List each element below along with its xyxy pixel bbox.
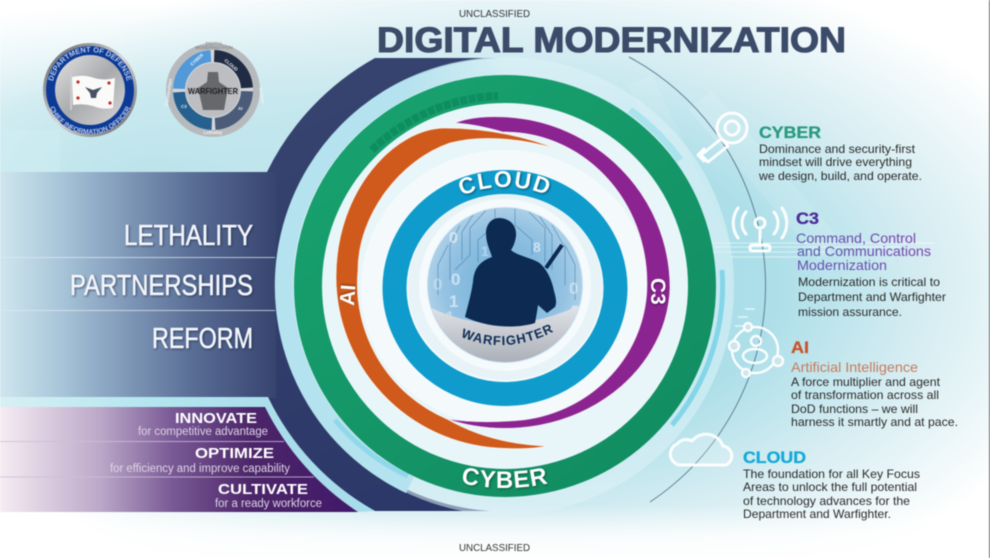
label: c3: C3 — [646, 278, 669, 305]
block: cloud — [743, 448, 920, 521]
icon: cloud — [670, 434, 732, 465]
text: cultivate: CULTIVATE — [218, 481, 308, 498]
text: innovate: INNOVATE — [175, 410, 257, 427]
block: ai: Artificial Intelligence — [791, 359, 918, 375]
block: ai: harness it smartly and at pace. — [791, 415, 958, 429]
text: cultivate — [215, 481, 322, 510]
seal small labels: MODERNIZATION — [195, 45, 233, 50]
block: cloud: Areas to unlock the full potential — [743, 480, 917, 494]
binary digits — [434, 232, 578, 316]
seal small labels: CLOUD — [223, 58, 239, 73]
flag — [72, 76, 115, 109]
binary digits: 0 — [569, 279, 578, 298]
panel: strategic priorities band — [0, 172, 276, 398]
seal: warfighter digital modernization: WARFIGHTER — [188, 86, 238, 96]
seal small labels: CYBER — [189, 52, 205, 67]
block: c3: Modernization — [797, 257, 887, 273]
seal small labels: AI — [238, 106, 242, 111]
text: optimize — [110, 445, 290, 475]
icon: key — [698, 113, 747, 162]
text: partnerships: PARTNERSHIPS — [70, 270, 253, 302]
binary digits: 1 — [445, 308, 454, 327]
block: cyber: CYBER — [759, 123, 821, 142]
block: cyber: Dominance and security-first — [759, 142, 916, 156]
text: innovate: for competitive advantage — [138, 426, 268, 438]
seal small labels — [164, 41, 266, 135]
seal small labels: Reform — [258, 87, 266, 104]
arc: c3 purple crescent — [447, 117, 670, 428]
flag pole — [70, 70, 72, 110]
navy crescent — [267, 58, 497, 511]
background top left tint — [0, 0, 570, 345]
title: DIGITAL MODERNIZATION — [377, 21, 846, 60]
block: c3: C3 — [796, 209, 819, 228]
text: cultivate: for a ready workforce — [215, 498, 322, 510]
seal small labels: Partnerships — [164, 78, 173, 106]
block: cloud: CLOUD — [743, 448, 806, 467]
seal small labels: DIGITAL — [205, 41, 223, 46]
seal: department of defense cio: CHIEF INFORMATION OFFICER — [50, 106, 130, 134]
block: c3 — [796, 209, 946, 319]
block: c3: Modernization is critical to — [798, 275, 940, 289]
inner disk — [319, 100, 691, 472]
block: cloud: Department and Warfighter. — [743, 507, 891, 521]
block: ai: AI — [791, 338, 809, 357]
ring: cloud — [394, 182, 616, 394]
binary digits: 0 — [449, 230, 458, 247]
label: ai: AI — [336, 284, 360, 306]
concentric target — [308, 89, 702, 483]
block: cloud: The foundation for all Key Focus — [743, 467, 920, 481]
seal segments — [178, 55, 248, 125]
block: ai: A force multiplier and agent — [791, 375, 941, 389]
seal lettering: DEPARTMENT OF DEFENSE — [48, 46, 132, 82]
band divider lines — [0, 258, 275, 310]
seal: warfighter digital modernization — [164, 41, 266, 137]
text: reform: REFORM — [152, 323, 253, 355]
block: c3: Command, Control — [796, 230, 916, 246]
panel: light cyan frame of lower panel — [0, 397, 375, 512]
binary digits: 8 — [533, 239, 541, 255]
text: warfighter: WARFIGHTER — [462, 324, 554, 346]
soldier silhouette — [465, 218, 562, 327]
flag stars — [76, 80, 112, 105]
right edge line — [989, 0, 990, 558]
binary digits: 1 — [449, 292, 458, 311]
seal small labels: Lethality — [204, 130, 223, 135]
block: c3: Department and Warfighter — [798, 290, 946, 304]
block: ai: DoD functions – we will — [791, 402, 918, 416]
text: optimize: for efficiency and improve capability — [110, 463, 290, 475]
text: lethality: LETHALITY — [124, 220, 253, 252]
block: cloud: of technology advances for the — [743, 494, 910, 508]
binary digits: 0 — [433, 275, 442, 294]
circuit traces — [438, 208, 575, 300]
block: cyber: we design, build, and operate. — [758, 169, 922, 183]
label: cyber: CYBER — [462, 467, 549, 490]
block: ai — [791, 338, 958, 429]
classification bottom: UNCLASSIFIED — [459, 542, 530, 554]
block: cyber: mindset will drive everything — [759, 155, 912, 169]
block: c3: mission assurance. — [798, 305, 902, 319]
label: cloud: CLOUD — [458, 170, 552, 196]
outer thin arc line — [629, 57, 766, 502]
light ring around target — [284, 66, 725, 506]
white inner panel — [361, 150, 649, 426]
text: innovate — [138, 410, 268, 438]
flag eagle — [85, 87, 102, 98]
arc: ai orange crescent — [336, 128, 557, 449]
background light streaks — [0, 80, 935, 326]
seal small labels: C3 — [181, 104, 187, 109]
classification top: UNCLASSIFIED — [459, 8, 530, 20]
ring: cyber — [308, 89, 702, 483]
binary digits: 0 — [570, 302, 579, 321]
seal: department of defense cio — [42, 42, 138, 138]
cyber ring dark segment band — [372, 96, 498, 150]
text: optimize: OPTIMIZE — [195, 445, 274, 462]
binary digits: 1 — [481, 243, 489, 259]
warfighter emblem — [426, 206, 584, 364]
white ring around warfighter — [408, 194, 602, 380]
block: cyber — [758, 123, 922, 183]
block: c3: and Communications — [797, 243, 931, 259]
grey lens — [432, 305, 580, 362]
icon: ai network — [729, 323, 783, 377]
panel: innovate optimize cultivate — [0, 407, 358, 512]
background bottom fade — [0, 505, 990, 558]
block: ai: of transformation across all — [791, 388, 939, 402]
seal center — [186, 63, 240, 117]
icon: antenna — [733, 208, 787, 251]
binary digits: 0 — [451, 270, 460, 289]
